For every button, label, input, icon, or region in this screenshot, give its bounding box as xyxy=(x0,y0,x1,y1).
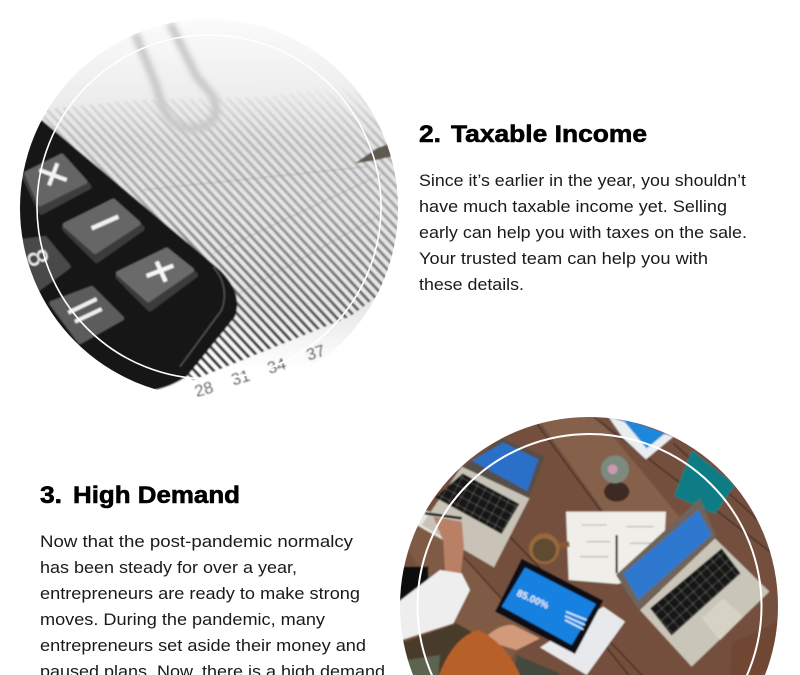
heading: taxable income: 2. xyxy=(419,121,441,148)
heading: high demand: High Demand xyxy=(73,482,240,509)
wooden table xyxy=(403,417,778,675)
body text: taxable income: early can help you with taxes on the sale. xyxy=(419,224,747,242)
table planks xyxy=(463,417,777,675)
section 2 text xyxy=(419,121,747,294)
body text: taxable income: Your trusted team can help you with xyxy=(419,250,708,268)
plant xyxy=(601,455,629,502)
calculator key: multiply xyxy=(25,156,88,212)
white ring on photo 1 xyxy=(37,35,381,379)
body text: high demand: Now that the post-pandemic normalcy xyxy=(40,533,354,551)
right hand xyxy=(731,622,777,675)
paper background xyxy=(41,40,398,397)
white ring on photo 2 xyxy=(418,434,762,675)
axis numbers: 31 xyxy=(229,366,252,389)
dark wood corner xyxy=(732,484,742,496)
heading: high demand: 3. xyxy=(40,482,62,509)
heading: taxable income: Taxable Income xyxy=(451,121,647,148)
teal folder xyxy=(674,450,735,514)
calculator key: minus xyxy=(65,201,142,260)
calculator edge highlight xyxy=(180,267,224,367)
calculator key: eight: 8 xyxy=(20,245,55,271)
body text: high demand: moves. During the pandemic, many xyxy=(40,611,326,629)
paper clip xyxy=(135,23,216,129)
notebook xyxy=(566,512,666,584)
paper under laptop 1 xyxy=(418,510,444,540)
left dark floor xyxy=(400,566,429,601)
photo: calculator on financial chart xyxy=(20,22,398,397)
calculator key: equals xyxy=(52,288,122,342)
calculator key: eight xyxy=(20,238,68,290)
tablet with blue screen: 85.00% xyxy=(515,588,550,612)
dark clothing xyxy=(404,623,472,675)
laptop 1 xyxy=(422,438,545,567)
red hair xyxy=(438,630,521,675)
pen in hand xyxy=(425,513,462,518)
hand holding tablet xyxy=(478,625,540,650)
section 3 text xyxy=(40,482,385,675)
paper under tablet xyxy=(540,607,625,675)
body text: high demand: has been steady for over a year, xyxy=(40,559,297,577)
calculator key: plus xyxy=(118,250,195,308)
coffee mug xyxy=(529,533,569,564)
axis numbers: 37 xyxy=(304,341,327,364)
body text: taxable income: Since it’s earlier in the year, you shouldn’t xyxy=(419,172,746,190)
axis numbers: 34 xyxy=(265,354,288,378)
calculator body xyxy=(0,120,237,391)
pen tip xyxy=(355,143,392,163)
top tablet xyxy=(608,417,673,459)
axis numbers xyxy=(194,344,323,397)
body text: high demand xyxy=(40,533,385,675)
photo: team working at wooden table xyxy=(400,417,778,675)
body text: taxable income: have much taxable income yet. Selling xyxy=(419,198,727,216)
lighter plank xyxy=(542,417,680,590)
body text: taxable income xyxy=(419,172,747,294)
striped chart lines xyxy=(40,83,417,380)
laptop 2 xyxy=(616,498,769,667)
chart cross lines xyxy=(143,167,383,297)
white shirt sleeve xyxy=(397,570,470,642)
axis numbers: 28 xyxy=(192,378,216,401)
body text: high demand: entrepreneurs set aside their money and xyxy=(40,637,366,655)
body text: high demand: entrepreneurs are ready to make strong xyxy=(40,585,360,603)
hand on laptop xyxy=(433,517,464,573)
body text: taxable income: these details. xyxy=(419,276,524,294)
tablet with blue screen xyxy=(495,559,603,654)
